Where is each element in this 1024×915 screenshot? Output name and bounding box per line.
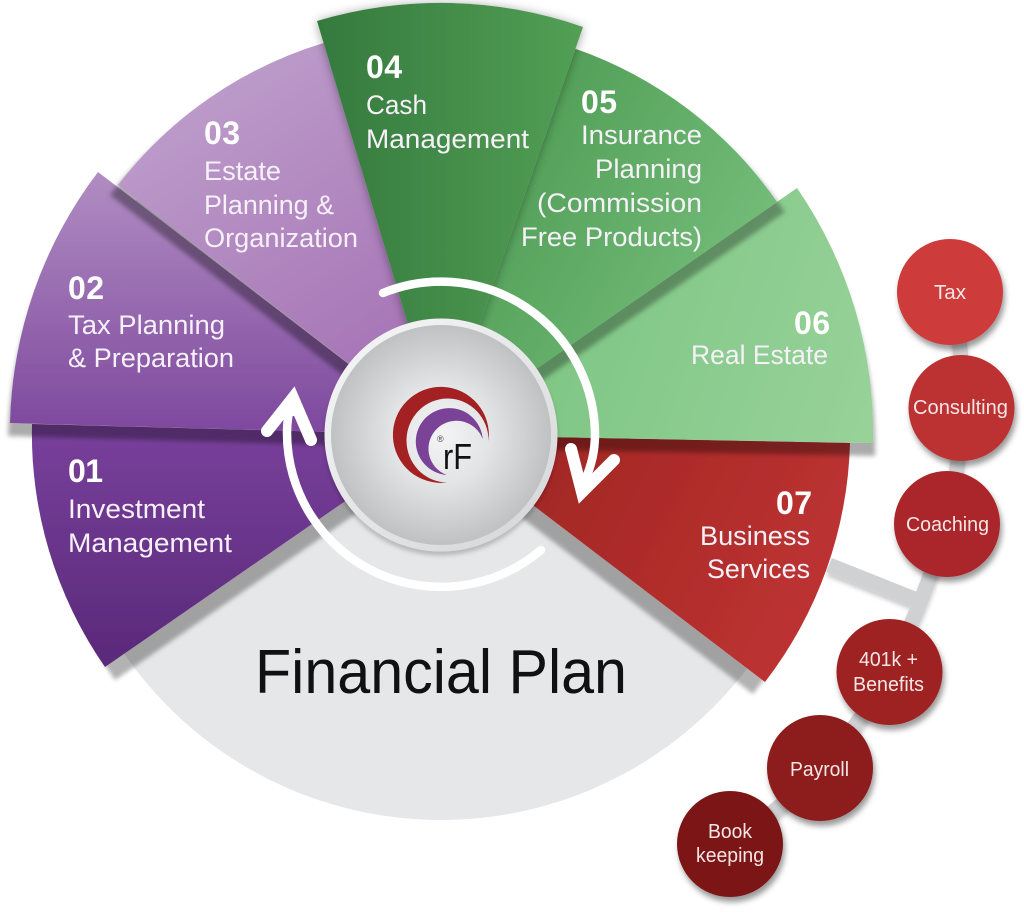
circle: Book keeping: Book: [708, 821, 753, 843]
logo: rF: rF: [443, 436, 472, 477]
segment 07: Business Services: Business: [700, 521, 810, 551]
heading: Financial Plan: Financial Plan: [255, 638, 627, 707]
circle: Book keeping: [677, 791, 783, 897]
segment 03: Estate Planning & Organization: Estate: [204, 156, 281, 186]
circle: Tax: Tax: [934, 282, 966, 304]
segment 06: Real Estate: Real Estate: [691, 340, 828, 370]
segment 05: Insurance Planning: Planning: [595, 154, 702, 184]
arrow: clockwise under bottom: [267, 396, 541, 587]
segment 05: Insurance Planning: Free Products): [521, 222, 702, 252]
logo: rF: [393, 387, 489, 483]
segment 07: Business Services: 07: [776, 485, 812, 521]
circle: Book keeping: keeping: [696, 845, 764, 867]
circle: 401k + Benefits: [836, 619, 942, 725]
circle: 401k + Benefits: Benefits: [853, 674, 924, 696]
logo: rF: ®: [437, 434, 444, 444]
segment 03: Estate Planning & Organization: [118, 43, 441, 435]
segment 06: Real Estate: [441, 188, 873, 443]
center disc with logo: [324, 318, 558, 552]
circle: Coaching: [894, 471, 1000, 577]
segment 07: Business Services: Services: [707, 554, 810, 584]
circle: Consulting: Consulting: [913, 397, 1008, 419]
segment 01: Investment Management: Investment: [68, 494, 206, 524]
circle: Payroll: Payroll: [790, 759, 849, 781]
segment 07: Business Services: [441, 435, 850, 682]
circle: Tax: [897, 239, 1003, 345]
segment 01: Investment Management: 01: [68, 453, 103, 489]
segment 05: Insurance Planning: (Commission: [537, 188, 702, 218]
circle: Payroll: [767, 715, 873, 821]
segment 06: Real Estate: 06: [794, 305, 830, 341]
segment 03: Estate Planning & Organization: Planning &: [204, 190, 334, 220]
segment 01: Investment Management: Management: [68, 528, 233, 558]
segment 03: Estate Planning & Organization: Organization: [204, 223, 358, 253]
arrow: clockwise over top: [383, 282, 614, 495]
segment 02: Tax Planning & Preparation: & Preparation: [68, 343, 234, 373]
segment 04: Cash Management: Management: [366, 124, 530, 154]
segment 05: Insurance Planning: 05: [581, 84, 617, 120]
segment 01: Investment Management: [32, 424, 441, 667]
segment 04: Cash Management: Cash: [366, 90, 427, 120]
segment 02: Tax Planning & Preparation: Tax Planning: [68, 310, 225, 340]
segment 05: Insurance Planning: Insurance: [581, 120, 702, 150]
circle: Coaching: Coaching: [906, 514, 989, 536]
segment 02: Tax Planning & Preparation: [10, 172, 441, 435]
connector: business services to sub-services: [730, 292, 962, 844]
segment 02: Tax Planning & Preparation: 02: [68, 270, 104, 306]
circle: 401k + Benefits: 401k +: [859, 649, 918, 671]
segment 04: Cash Management: [317, 3, 583, 435]
segment 03: Estate Planning & Organization: 03: [204, 115, 240, 151]
segment 04: Cash Management: 04: [366, 49, 402, 85]
circle: Consulting: [908, 355, 1014, 461]
segment 05: Insurance Planning: [441, 49, 777, 435]
